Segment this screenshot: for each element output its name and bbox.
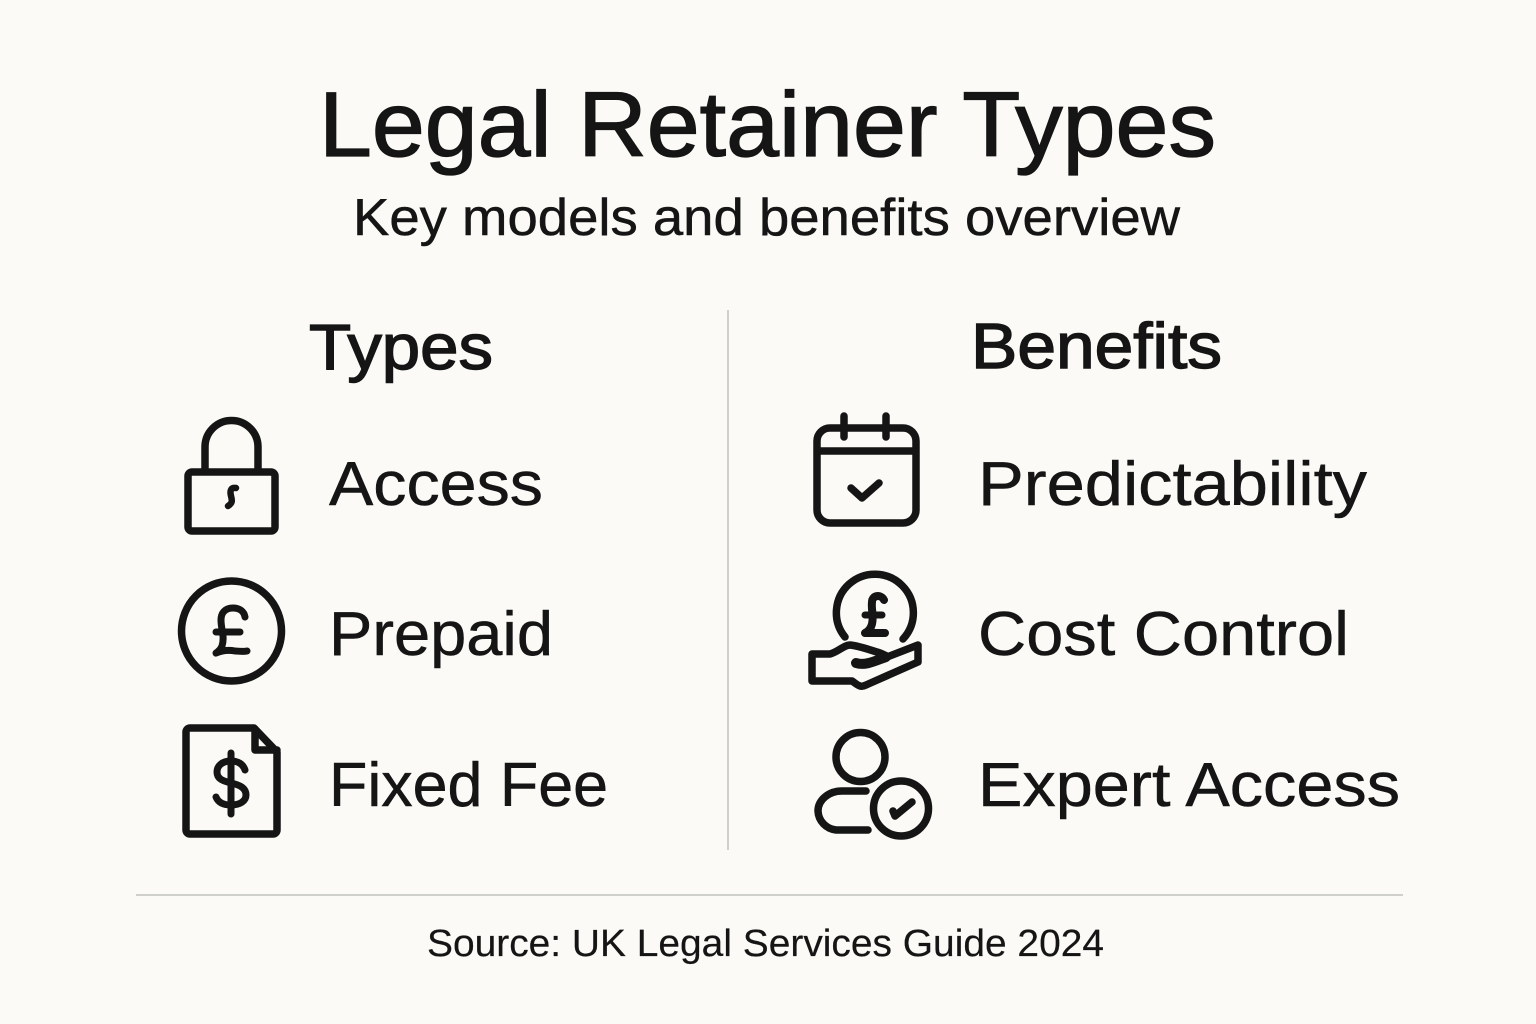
label: prepaid: Prepaid xyxy=(329,600,553,669)
icon: hand with pound coin xyxy=(812,574,918,686)
label: expert access: Expert Access xyxy=(978,751,1400,820)
panel: benefits xyxy=(812,310,1400,836)
heading: types: Types xyxy=(309,311,493,383)
panel: types xyxy=(182,311,608,834)
label: access: Access xyxy=(329,450,543,519)
icon: calendar xyxy=(817,416,916,523)
label: cost control: Cost Control xyxy=(978,600,1349,669)
icon: fee document xyxy=(186,728,277,834)
heading: benefits: Benefits xyxy=(971,310,1222,382)
label: fixed fee: Fixed Fee xyxy=(329,751,608,820)
icon: padlock xyxy=(188,420,275,531)
subtitle: Key models and benefits overview xyxy=(353,189,1180,247)
title: Legal Retainer Types xyxy=(319,74,1216,176)
source note: Source: UK Legal Services Guide 2024 xyxy=(427,923,1104,965)
icon: pound coin xyxy=(182,581,282,681)
label: predictability: Predictability xyxy=(978,450,1367,519)
icon: person with check xyxy=(818,732,928,836)
